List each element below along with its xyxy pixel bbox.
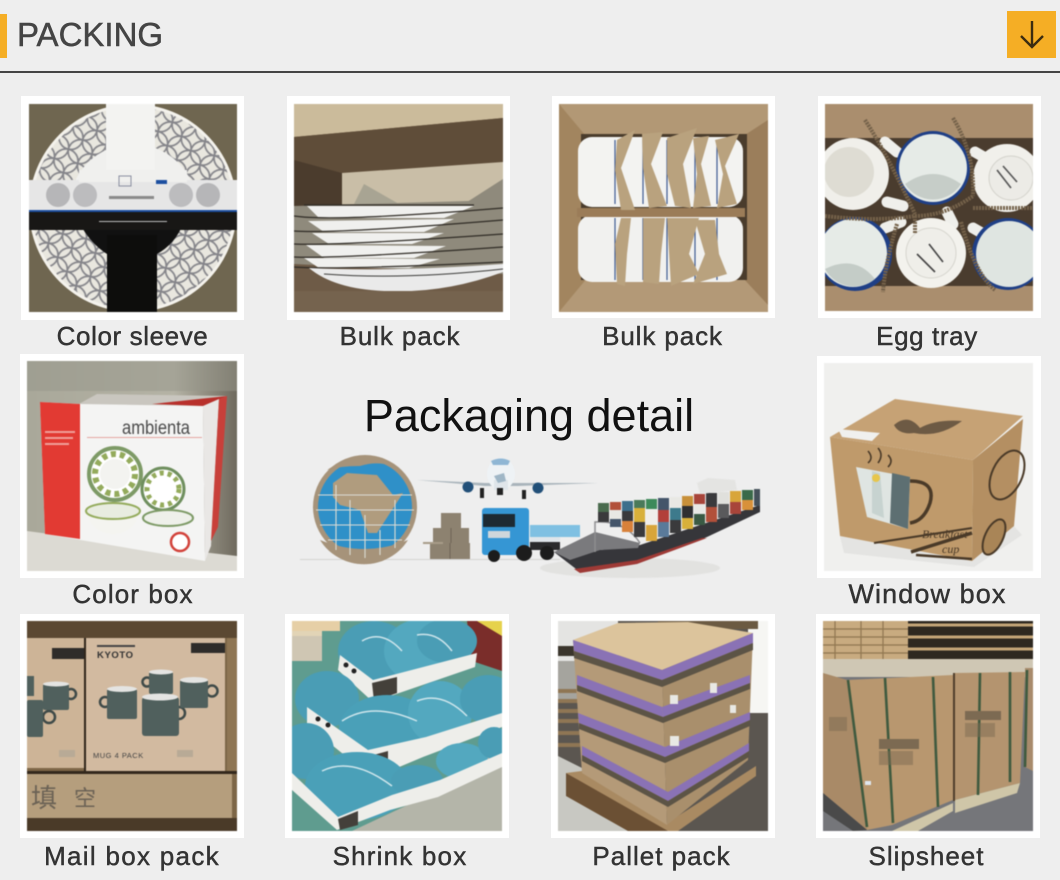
label: color sleeve: Color sleeve <box>57 321 208 351</box>
photo: shrink box <box>285 614 509 838</box>
label: window box: Window box <box>848 579 1007 609</box>
photo: color box <box>20 354 244 578</box>
photo: window box <box>817 356 1041 578</box>
icon: plane <box>417 458 598 499</box>
photo: window box: Breakfast <box>922 527 968 541</box>
middle row packs <box>295 671 516 778</box>
icon: truck <box>482 508 580 562</box>
heading: packaging detail: Packaging detail <box>364 390 694 441</box>
photo: mail box pack: 填 <box>31 783 57 813</box>
photo: window box: cup <box>942 542 959 556</box>
illustration: globe, plane, truck and ship <box>300 454 761 578</box>
photo: bulk pack bowls <box>552 96 775 318</box>
label: bulk pack: Bulk pack <box>602 321 723 351</box>
photo: egg tray mugs <box>818 96 1041 318</box>
label: slipsheet: Slipsheet <box>869 841 984 871</box>
label: shrink box: Shrink box <box>333 841 467 871</box>
photo: mail box pack: KYOTO <box>97 650 134 661</box>
photo: slipsheet <box>816 614 1040 838</box>
photo: mail box pack <box>20 614 244 838</box>
icon: container ship <box>540 478 760 578</box>
top pack <box>338 619 477 702</box>
header accent <box>0 14 7 58</box>
photo: mail box pack: 空 <box>74 786 96 811</box>
icon: down arrow button <box>1007 11 1056 58</box>
label: pallet pack: Pallet pack <box>592 841 731 871</box>
label: mail box pack: Mail box pack <box>44 841 220 871</box>
bottom row packs <box>278 723 510 830</box>
icon: boxes <box>423 513 470 559</box>
icon: globe <box>300 455 560 564</box>
photo: bulk pack plates <box>287 96 510 320</box>
photo: color box: ambienta <box>122 418 190 439</box>
header bar <box>0 11 1060 73</box>
label: color box: Color box <box>72 579 194 609</box>
photo: pallet pack <box>551 614 775 838</box>
label: bulk pack: Bulk pack <box>340 321 460 351</box>
heading: PACKING: PACKING <box>17 16 163 53</box>
photo: mail box pack: MUG 4 PACK <box>93 751 144 760</box>
label: egg tray: Egg tray <box>876 321 978 351</box>
photo: color sleeve <box>21 96 244 320</box>
